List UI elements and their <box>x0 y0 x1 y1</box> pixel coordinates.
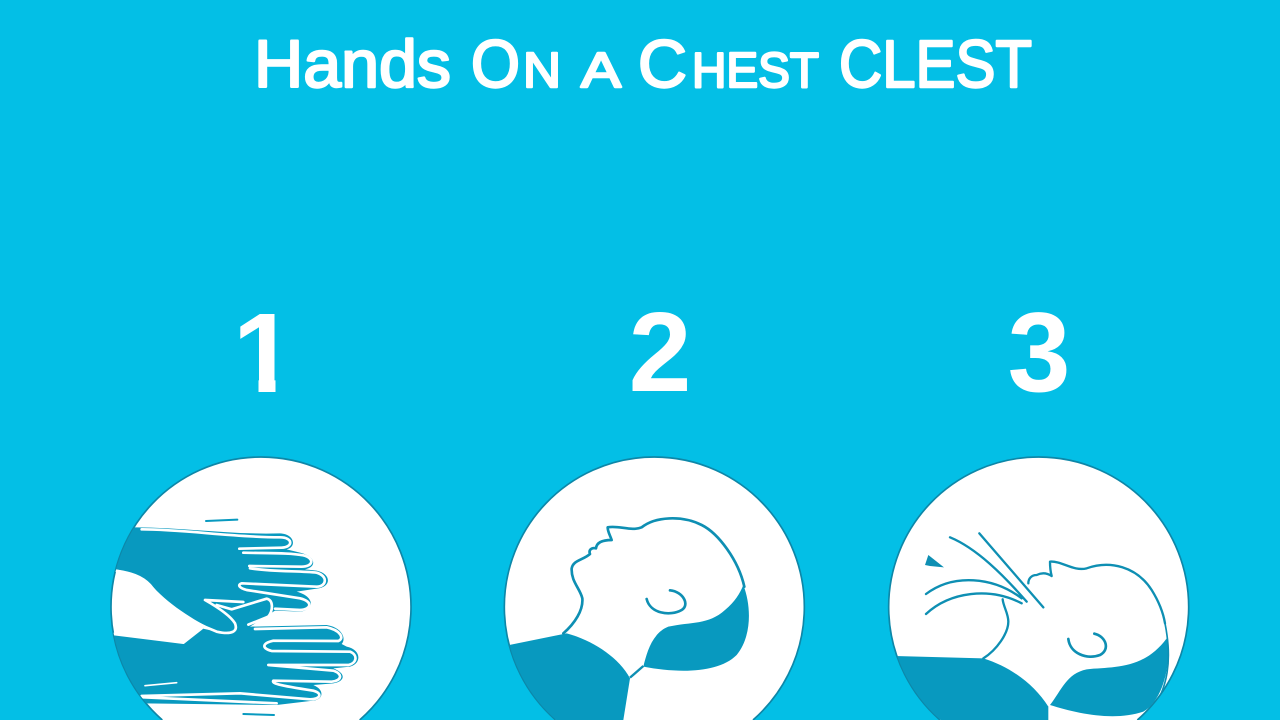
panel: step 2 head tilt <box>504 457 804 720</box>
head support <box>643 585 749 671</box>
shoulder <box>890 656 1048 720</box>
panel: step 1 hands on chest <box>110 457 411 720</box>
title: A <box>581 44 621 98</box>
shoulder <box>505 633 630 720</box>
icon: tilted head profile <box>505 518 749 720</box>
breath mark <box>925 555 944 567</box>
head support <box>1050 638 1168 716</box>
step number 1: 1 <box>233 290 295 416</box>
title: Hands <box>254 27 451 102</box>
title: HEST <box>692 44 819 98</box>
title: C <box>638 27 687 102</box>
back of head line <box>1160 624 1170 694</box>
title: CLEST <box>839 27 1032 102</box>
neck line <box>630 666 643 678</box>
icon: head with breath lines <box>890 533 1168 720</box>
title: O <box>471 27 520 102</box>
ear <box>647 590 685 613</box>
step number 3: 3 <box>1008 289 1070 415</box>
breath lines <box>926 533 1043 614</box>
icon: overlapping hands <box>110 520 358 715</box>
title: N <box>523 44 561 98</box>
title <box>254 27 1032 102</box>
face outline <box>983 562 1165 658</box>
panel: step 3 rescue breath <box>889 457 1189 720</box>
face outline <box>563 518 744 633</box>
step number 2: 2 <box>629 289 691 415</box>
ear <box>1068 634 1106 657</box>
